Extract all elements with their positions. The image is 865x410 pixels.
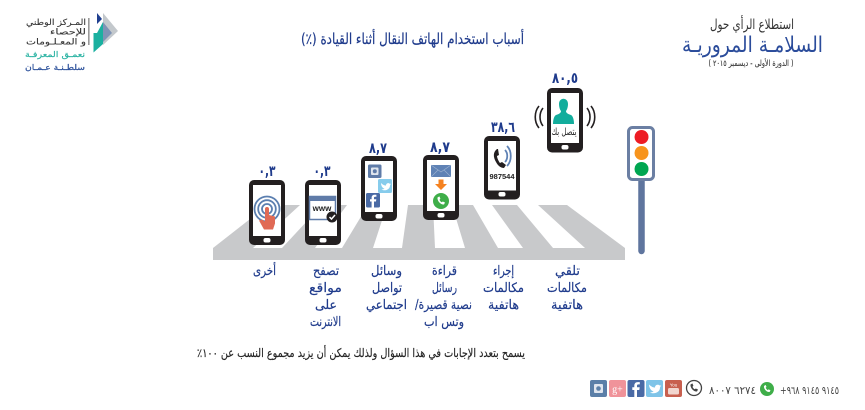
home button [320, 238, 326, 242]
label: receiving calls: مكالمات [547, 281, 587, 296]
label: social media: تواصل [372, 281, 402, 296]
screen [365, 161, 393, 212]
phone: messages [423, 138, 459, 220]
phone body [305, 180, 341, 245]
phone body [484, 136, 520, 200]
icon: whatsapp [433, 193, 449, 209]
label: other: أخرى [253, 262, 276, 279]
organisation name: و المعـلـومات [26, 38, 86, 48]
icon: check badge [326, 212, 338, 222]
label: social media [366, 264, 407, 313]
road crossing [213, 205, 625, 260]
icon: left vibration [535, 106, 543, 128]
label: social media: اجتماعي [366, 298, 407, 313]
phone: web browsing [305, 162, 341, 245]
value: ٨,٧ [430, 138, 450, 156]
survey date: ( الدورة الأولى - ديسمبر ٢٠١٥ ) [708, 58, 794, 69]
phone: making calls [484, 118, 520, 200]
icon: instagram [590, 380, 607, 397]
phone body [547, 88, 583, 152]
value: ٨٠,٥ [552, 69, 578, 87]
label: social media: وسائل [371, 264, 402, 279]
label: web browsing: الانترنت [310, 315, 341, 330]
dialled number: 987544 [490, 174, 515, 181]
www label: www [312, 204, 332, 213]
chart title: أسباب استخدام الهاتف النقال أثناء القيادة (٪) [301, 29, 524, 48]
icon: touch rings [254, 196, 280, 222]
organisation name [26, 18, 86, 48]
survey title: السلامـة المروريـة [682, 33, 823, 58]
logo [25, 13, 118, 72]
phone: social media [361, 139, 397, 221]
phone: receiving calls [535, 69, 595, 152]
caller text: يتصل بك [552, 127, 577, 138]
icon: twitter [378, 179, 392, 193]
label: receiving calls [547, 264, 587, 313]
label: web browsing: على [315, 298, 337, 313]
label: making calls: مكالمات [483, 281, 524, 296]
label: web browsing: مواقع [309, 281, 342, 296]
label: receiving calls: تلقي [555, 264, 580, 279]
value: ٠,٣ [258, 162, 276, 180]
home button [498, 192, 506, 196]
icon: instagram [368, 164, 382, 178]
phone number: ٨٠٠٧ ٦٢٧٤ [709, 384, 756, 397]
phone body [423, 155, 459, 220]
label: making calls: هاتفية [488, 298, 519, 313]
value: ٨,٧ [369, 139, 387, 157]
home button [438, 213, 444, 218]
icon: right vibration [587, 106, 595, 128]
home button [376, 214, 382, 218]
whatsapp number: +٩٦٨ ٩١٤٥ ٩١٤٥ [780, 384, 839, 397]
icon: handset [494, 149, 506, 168]
label: web browsing: تصفح [313, 264, 339, 279]
home button [264, 238, 270, 242]
icon: whatsapp [760, 382, 774, 396]
icon: envelope [431, 165, 451, 177]
icon: pointing hand [259, 207, 275, 230]
label: web browsing [309, 264, 342, 330]
icon: browser window [309, 196, 336, 220]
icon: youtube: You [670, 382, 678, 388]
icon: arrow [435, 180, 447, 190]
icon: signal waves [505, 146, 511, 166]
organisation name: للإحصاء [50, 28, 86, 38]
housing [628, 128, 654, 180]
value: ٠,٣ [314, 162, 330, 180]
phone body [249, 180, 285, 245]
label: receiving calls: هاتفية [551, 298, 583, 313]
label: messages: قراءة [432, 264, 457, 279]
icon: facebook [628, 380, 644, 397]
icon: youtube [665, 380, 682, 397]
icon: phone [686, 380, 702, 396]
label: making calls: إجراء [493, 264, 514, 279]
screen [551, 93, 579, 143]
logo mark [94, 13, 118, 52]
organisation name: المـركز الوطني [26, 18, 86, 28]
phone: other [249, 162, 285, 245]
label: messages: رسائل [432, 281, 457, 296]
label: making calls [483, 264, 524, 313]
footnote: يسمح بتعدد الإجابات في هذا السؤال ولذلك يمكن أن يزيد مجموع النسب عن ١٠٠٪ [197, 345, 525, 361]
logo divider [88, 18, 90, 45]
phone body [361, 156, 397, 221]
icon: twitter [646, 380, 663, 397]
screen [427, 160, 455, 211]
contact footer [590, 380, 839, 397]
red lamp [634, 130, 648, 144]
pole [638, 181, 645, 251]
amber lamp [634, 146, 648, 160]
home button [562, 145, 568, 150]
label: messages: نصية قصيرة/ [415, 298, 472, 313]
traffic light [628, 128, 654, 251]
icon: caller [553, 99, 574, 124]
screen [488, 141, 516, 190]
icon: facebook [366, 193, 380, 208]
label: messages [415, 264, 472, 330]
green lamp [634, 162, 648, 176]
label: messages: وتس اب [424, 315, 464, 330]
logo country: سلطـنـة عـمـان [25, 63, 85, 72]
value: ٣٨,٦ [491, 118, 515, 136]
category labels [253, 262, 587, 330]
logo tagline: نعمـق المعرفـة [25, 50, 85, 59]
icon: google plus: g+ [612, 384, 623, 396]
icon: google plus [609, 380, 626, 397]
screen [309, 185, 337, 236]
survey kicker: استطلاع الرأي حول [710, 15, 794, 33]
survey heading [682, 15, 823, 69]
screen [253, 185, 281, 236]
